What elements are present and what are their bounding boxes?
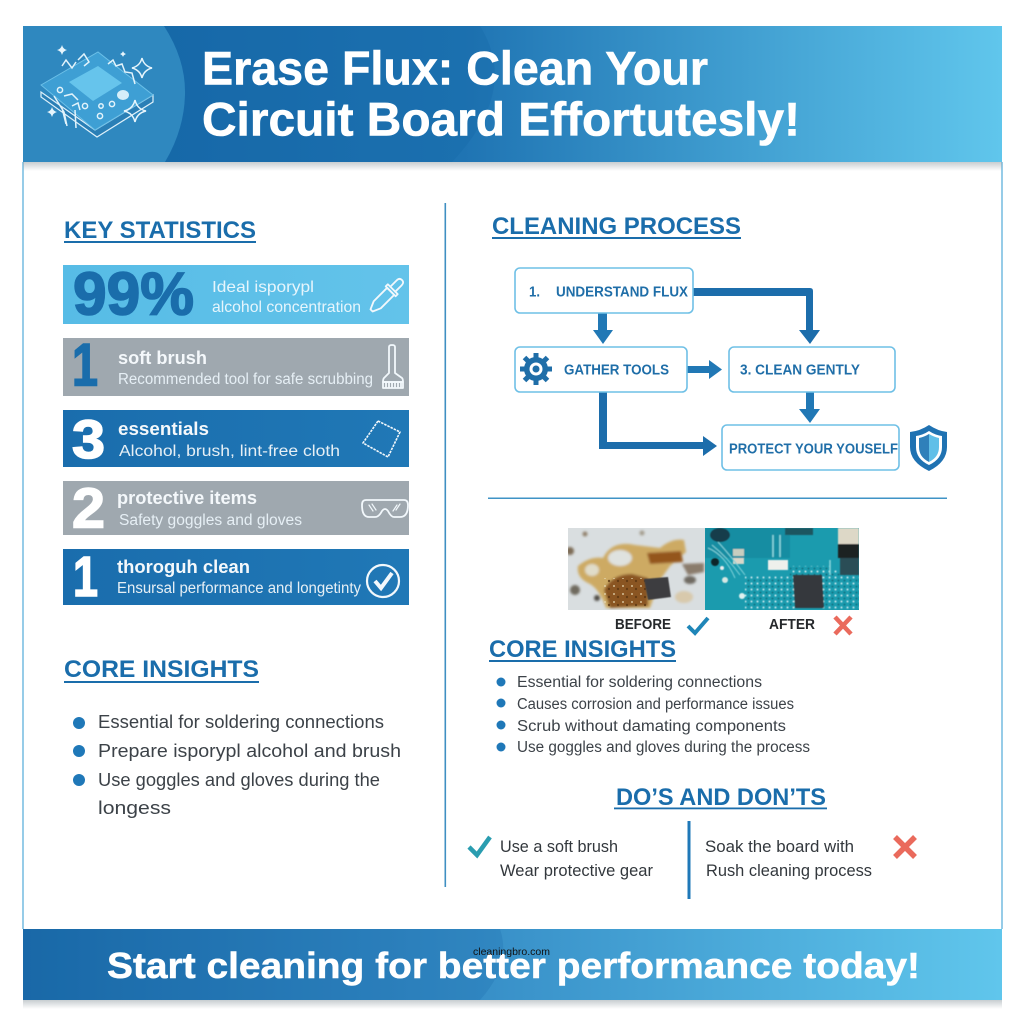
title: Erase Flux: Clean Your xyxy=(202,42,708,94)
don't list: Rush cleaning process xyxy=(706,862,872,880)
step: protect yourself xyxy=(722,425,899,470)
step: understand flux: 1. xyxy=(529,284,540,300)
stat: thorough clean: thoroguh clean xyxy=(117,556,250,577)
do list: Use a soft brush xyxy=(500,838,618,856)
arrow: step 3 to step 4 xyxy=(799,392,820,423)
step: protect yourself: PROTECT YOUR YOUSELF xyxy=(729,442,898,458)
heading: core insights: CORE INSIGHTS xyxy=(64,656,259,683)
panel: core insights left xyxy=(64,656,401,818)
stat: protective items: Safety goggles and gloves xyxy=(119,512,302,529)
icon: shield xyxy=(910,425,947,471)
bullet list xyxy=(73,712,401,818)
watermark: cleaningbro.com xyxy=(473,946,550,958)
bullet list: Essential for soldering connections xyxy=(517,674,762,691)
bullet list: longess xyxy=(98,798,171,818)
center divider xyxy=(688,821,690,899)
bullet list xyxy=(496,674,810,756)
arrow: step 1 to step 2 xyxy=(593,313,613,344)
header banner xyxy=(23,26,1002,171)
panel: do's and don'ts xyxy=(469,784,915,899)
bullet list: Essential for soldering connections xyxy=(98,712,384,732)
don't list xyxy=(705,838,872,880)
step: understand flux xyxy=(515,268,693,313)
stat: protective items xyxy=(63,476,409,540)
stat: essentials: 3 xyxy=(72,410,105,470)
panel: cleaning process xyxy=(492,213,947,471)
heading: core insights: CORE INSIGHTS xyxy=(489,636,676,663)
bullet list: Use goggles and gloves during the xyxy=(98,770,380,790)
icon: red cross xyxy=(895,837,915,857)
stat: soft brush: 1 xyxy=(72,332,98,398)
heading: do's and don'ts: DO’S AND DON’TS xyxy=(616,784,826,811)
step: gather tools xyxy=(515,347,687,392)
step: clean gently xyxy=(729,347,895,392)
panel: key statistics xyxy=(63,217,409,609)
stat: essentials xyxy=(63,410,409,470)
bullet list: Prepare isporypl alcohol and brush xyxy=(98,741,401,761)
stat: soft brush: Recommended tool for safe scrubbing xyxy=(118,371,373,388)
label: before: BEFORE xyxy=(615,617,671,633)
icon: teal check xyxy=(469,837,490,855)
step: understand flux: UNDERSTAND FLUX xyxy=(556,284,688,300)
stat: essentials: Alcohol, brush, lint-free cloth xyxy=(119,443,340,460)
arrow: step 1 to step 3 xyxy=(693,288,820,344)
bullet list: Causes corrosion and performance issues xyxy=(517,696,794,713)
icon: circuit board xyxy=(41,45,153,137)
column divider xyxy=(444,203,446,887)
footer banner xyxy=(23,929,1002,1009)
stat: thorough clean xyxy=(63,545,409,609)
arrow: step 2 to step 3 xyxy=(687,360,722,379)
stat: thorough clean: 1 xyxy=(73,545,98,609)
do list xyxy=(500,838,653,880)
stat: soft brush: soft brush xyxy=(118,347,207,368)
title xyxy=(202,42,800,146)
icon: dropper xyxy=(367,275,407,315)
stat: 99 percent: 99% xyxy=(73,260,194,328)
step: gather tools: GATHER TOOLS xyxy=(564,362,669,378)
stat: 99 percent: alcohol concentration xyxy=(212,299,361,316)
title: Circuit Board Effortutesly! xyxy=(202,92,800,146)
label: after: AFTER xyxy=(769,617,815,633)
stat: thorough clean: Ensursal performance and longetinty xyxy=(117,580,361,597)
do list: Wear protective gear xyxy=(500,862,653,880)
icon: brush xyxy=(383,345,403,388)
stat: protective items: 2 xyxy=(72,476,105,540)
icon: cloth xyxy=(363,421,400,457)
bullet list: Use goggles and gloves during the process xyxy=(517,739,810,756)
icon: red cross xyxy=(835,617,851,634)
bullet list: Scrub without damating components xyxy=(517,718,786,735)
icon: teal check xyxy=(688,618,708,633)
arrow: step 2 to step 4 xyxy=(599,392,717,456)
stat: 99 percent: Ideal isporypl xyxy=(212,279,314,296)
before and after photo xyxy=(566,528,859,634)
stat: essentials: essentials xyxy=(118,418,209,439)
stat: protective items: protective items xyxy=(117,487,257,508)
panel: core insights right xyxy=(489,636,810,756)
icon: check circle xyxy=(367,565,399,597)
icon: gear xyxy=(520,353,552,385)
icon: goggles xyxy=(362,500,408,517)
stat: soft brush xyxy=(63,332,409,398)
divider xyxy=(488,498,947,499)
heading: key statistics: KEY STATISTICS xyxy=(64,217,256,244)
footer text: Start cleaning for better performance today! xyxy=(107,945,920,986)
step: clean gently: 3. CLEAN GENTLY xyxy=(740,362,860,378)
heading: cleaning process: CLEANING PROCESS xyxy=(492,213,741,240)
stat: 99 percent xyxy=(63,260,409,328)
don't list: Soak the board with xyxy=(705,838,854,856)
